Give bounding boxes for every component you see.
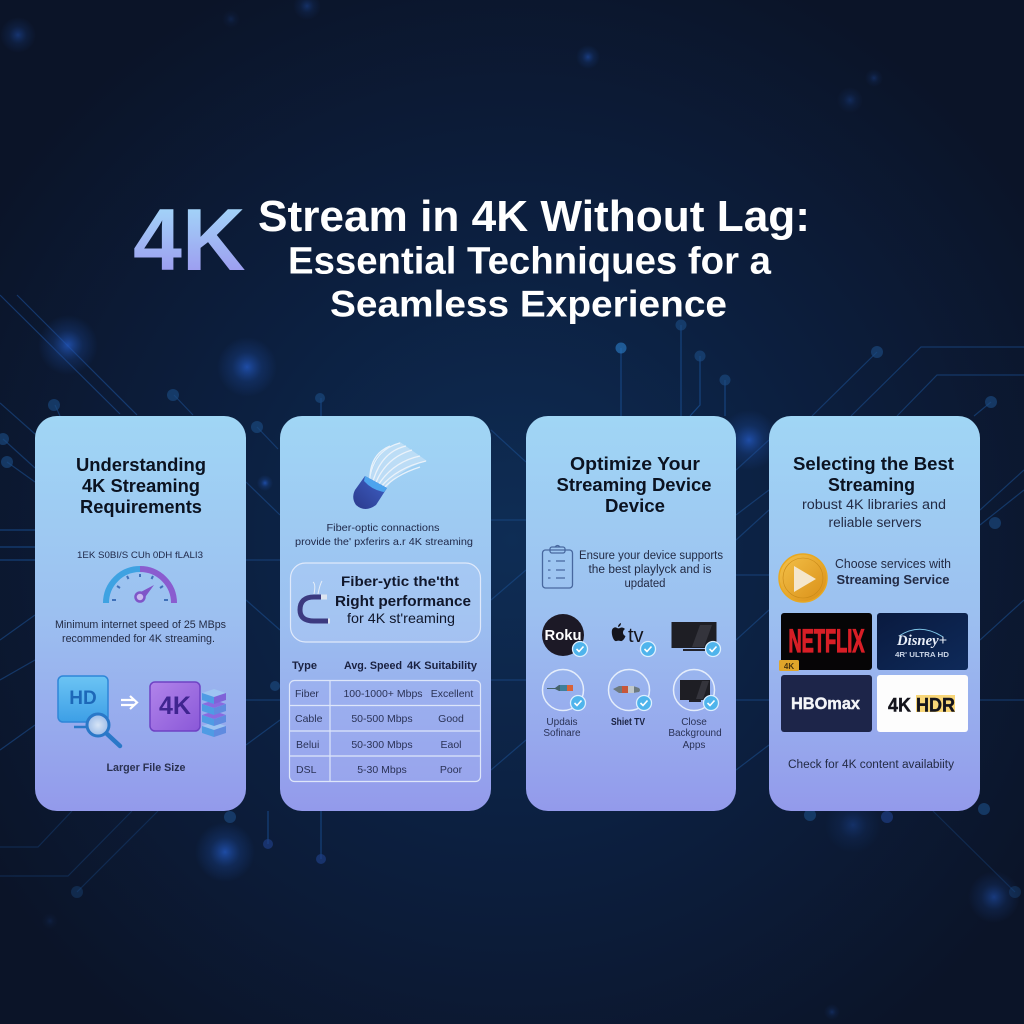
table: connection types xyxy=(290,660,480,782)
logo tile: HBO Max: HBOmax xyxy=(791,694,861,713)
panel: optimize device xyxy=(526,416,736,811)
logo tile: HBO Max xyxy=(781,675,872,732)
logo tile: Netflix: 4K xyxy=(784,662,794,671)
logo tile: Netflix: NETFLIX xyxy=(788,623,865,659)
heading: optimize: Device xyxy=(605,496,665,516)
arrow xyxy=(121,696,137,709)
text: minimum speed xyxy=(55,619,226,645)
icon: television xyxy=(672,622,720,656)
logo: 4K: 4K xyxy=(133,190,246,289)
table header: 4K Suitability xyxy=(407,660,478,672)
title: Stream in 4K Without Lag: xyxy=(258,192,810,241)
icon: Apple TV xyxy=(612,623,656,656)
icon: bent cable xyxy=(300,581,330,621)
table rows: 50-300 Mbps xyxy=(351,739,413,751)
heading: selecting: Streaming xyxy=(828,475,915,495)
icon: speed gauge xyxy=(106,569,174,603)
callout: right performance xyxy=(290,563,480,642)
icon: Apple TV: tv xyxy=(628,625,644,647)
table rows: 50-500 Mbps xyxy=(351,713,413,725)
icon: Roku: Roku xyxy=(544,627,582,644)
text: ensure device: the best playlyck and is xyxy=(588,564,712,576)
logo tile: Disney+: 4R' ULTRA HD xyxy=(895,650,950,659)
logo tile: Netflix xyxy=(779,613,872,671)
text: fiber intro: Fiber-optic connactions xyxy=(326,522,440,534)
step: close background apps: Apps xyxy=(683,740,705,751)
text: fiber intro xyxy=(295,522,473,548)
text: choose services xyxy=(835,557,951,587)
table header xyxy=(292,660,478,672)
background circuit dots xyxy=(0,320,1021,898)
text: ensure device: Ensure your device supports xyxy=(579,550,723,562)
logo tile: Disney+: Disney+ xyxy=(896,633,947,649)
table rows xyxy=(295,688,473,776)
panel: fiber-optic connections xyxy=(280,416,491,811)
panel: 4K streaming requirements xyxy=(35,416,246,811)
table header: Type xyxy=(292,660,317,672)
table rows: DSL xyxy=(296,764,317,776)
table rows: 5-30 Mbps xyxy=(357,764,407,776)
table rows: Good xyxy=(438,713,464,725)
heading: requirements xyxy=(76,455,206,517)
background circuit pattern xyxy=(0,295,1024,892)
heading: optimize: Streaming Device xyxy=(556,475,712,495)
panel: streaming service xyxy=(769,416,980,811)
heading: optimize: Optimize Your xyxy=(570,454,700,474)
caption: larger file size: Larger File Size xyxy=(106,762,186,774)
icon: 4K with storage xyxy=(150,682,226,737)
step: smart TV xyxy=(608,670,652,728)
logo tile: Disney+ xyxy=(877,613,968,670)
text: robust libraries xyxy=(802,497,946,530)
table rows: Excellent xyxy=(431,688,473,700)
title: Seamless Experience xyxy=(330,284,727,324)
text: ensure device xyxy=(579,550,723,590)
table rows: 100-1000+ Mbps xyxy=(343,688,423,700)
heading: requirements: Requirements xyxy=(80,497,202,517)
callout: right performance: for 4K st'reaming xyxy=(347,610,455,626)
logo tile: 4K HDR xyxy=(877,675,968,732)
table rows: Poor xyxy=(440,764,463,776)
step: update software xyxy=(542,670,586,739)
step: close background apps xyxy=(668,670,722,751)
heading: selecting xyxy=(793,454,954,495)
icon: Roku xyxy=(542,614,588,656)
title xyxy=(258,192,810,324)
icon: HD with magnifier xyxy=(58,676,120,746)
text: choose services: Streaming Service xyxy=(836,573,950,587)
table rows: Fiber xyxy=(295,688,319,700)
step: close background apps: Background xyxy=(668,728,722,739)
text: choose services: Choose services with xyxy=(835,557,951,571)
text: robust libraries: robust 4K libraries and xyxy=(802,497,946,512)
table rows: Cable xyxy=(295,713,323,725)
text: minimum speed: Minimum internet speed of 25 MBps xyxy=(55,619,226,631)
icon: play button xyxy=(779,554,827,602)
step: smart TV: Shiet TV xyxy=(611,717,645,728)
text: minimum speed: recommended for 4K streaming. xyxy=(62,633,215,645)
icon: 4K with storage: 4K xyxy=(159,692,191,720)
logo tile: 4K HDR: 4K HDR xyxy=(888,696,955,716)
heading: requirements: Understanding xyxy=(76,455,206,475)
step: update software: Updais xyxy=(546,717,578,728)
callout: right performance: Right performance xyxy=(335,593,471,610)
callout: right performance: Fiber-ytic the'tht xyxy=(341,573,459,589)
heading: selecting: Selecting the Best xyxy=(793,454,954,474)
icon: HD with magnifier: HD xyxy=(69,688,97,709)
text: robust libraries: reliable servers xyxy=(828,515,922,530)
table rows: Eaol xyxy=(440,739,462,751)
caption: check availability: Check for 4K content availabiity xyxy=(788,759,954,771)
heading: requirements: 4K Streaming xyxy=(82,476,200,496)
table header: Avg. Speed xyxy=(344,660,402,672)
step: update software: Sofinare xyxy=(543,728,581,739)
icon: clipboard xyxy=(542,546,572,588)
heading: optimize xyxy=(556,454,712,516)
gauge label: 1EK S0BI/S CUh 0DH fLALI3 xyxy=(77,550,203,561)
icon: fiber cable xyxy=(353,442,427,509)
title: Essential Techniques for a xyxy=(288,240,772,282)
table rows: Belui xyxy=(296,739,319,751)
text: fiber intro: provide the' pxferirs a.r 4K streaming xyxy=(295,536,473,548)
step: close background apps: Close xyxy=(681,717,707,728)
text: ensure device: updated xyxy=(624,578,666,590)
